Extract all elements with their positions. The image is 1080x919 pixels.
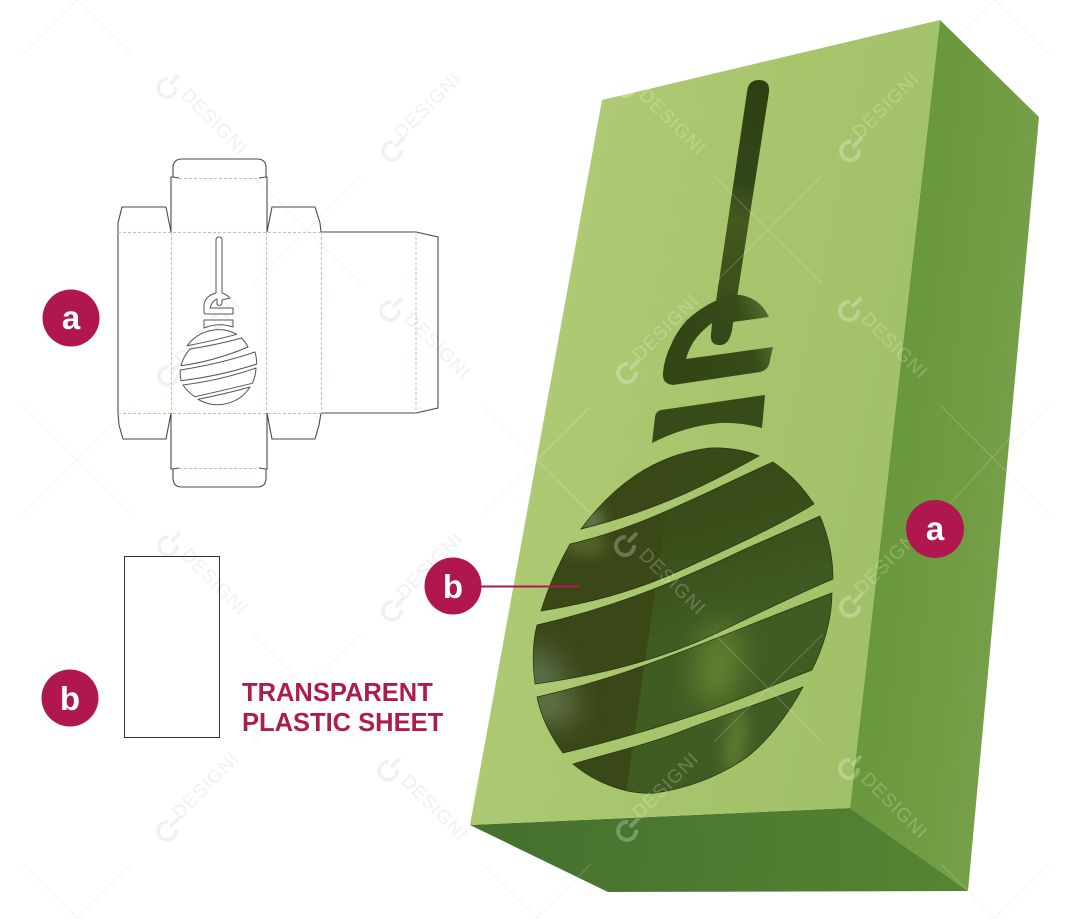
watermark pattern on box: DESIGNI: [629, 748, 704, 824]
badge: b (sheet): [42, 670, 98, 726]
dieline fold lines: [118, 178, 416, 468]
window: collar: [652, 395, 765, 443]
badge: b (sheet): b: [60, 680, 80, 717]
watermark pattern on white: DESIGNI: [391, 68, 466, 144]
watermark pattern on box: DESIGNI: [634, 85, 710, 160]
dieline: box template: [118, 159, 438, 487]
watermark pattern on box: DESIGNI: [849, 68, 924, 144]
watermark pattern on box: DESIGNI: [851, 524, 926, 600]
callout: b pointing at window: b: [443, 568, 463, 605]
plastic sheet caption: TRANSPARENT: [242, 679, 433, 707]
watermark pattern on box: [483, 68, 1039, 919]
dieline ornament window: [180, 237, 257, 405]
badge: a (box side): a: [926, 510, 945, 547]
watermark pattern on white: DESIGNI: [171, 294, 246, 370]
badge: a (dieline): [42, 290, 100, 346]
watermark pattern on box: DESIGNI: [634, 545, 710, 620]
watermark pattern on white: DESIGNI: [399, 309, 475, 384]
window edge shadow: [533, 448, 833, 793]
box bottom side: [470, 808, 968, 892]
window: hanging stick and hook: [663, 80, 773, 385]
watermark pattern on box: DESIGNI: [856, 769, 932, 844]
3D box: [470, 20, 1039, 892]
badge: a (dieline): a: [62, 299, 81, 336]
box right side: [850, 20, 1039, 891]
watermark pattern on white: DESIGNI: [393, 528, 468, 604]
window: ornament ball stripes: [534, 448, 833, 793]
watermark pattern on box: DESIGNI: [856, 309, 932, 384]
watermark pattern on white: DESIGNI: [396, 771, 472, 846]
watermark pattern on box: DESIGNI: [629, 290, 704, 366]
badge: a (box side): [906, 500, 964, 558]
watermark pattern on white: DESIGNI: [169, 748, 244, 824]
callout: b pointing at window: [424, 558, 580, 614]
watermark pattern on white: DESIGNI: [176, 545, 252, 620]
plastic sheet outline: [124, 556, 220, 738]
box front face: [470, 20, 940, 825]
watermark pattern on white: DESIGNI: [176, 85, 252, 160]
plastic sheet caption: PLASTIC SHEET: [242, 709, 444, 737]
dieline cut outlines: [118, 159, 438, 487]
